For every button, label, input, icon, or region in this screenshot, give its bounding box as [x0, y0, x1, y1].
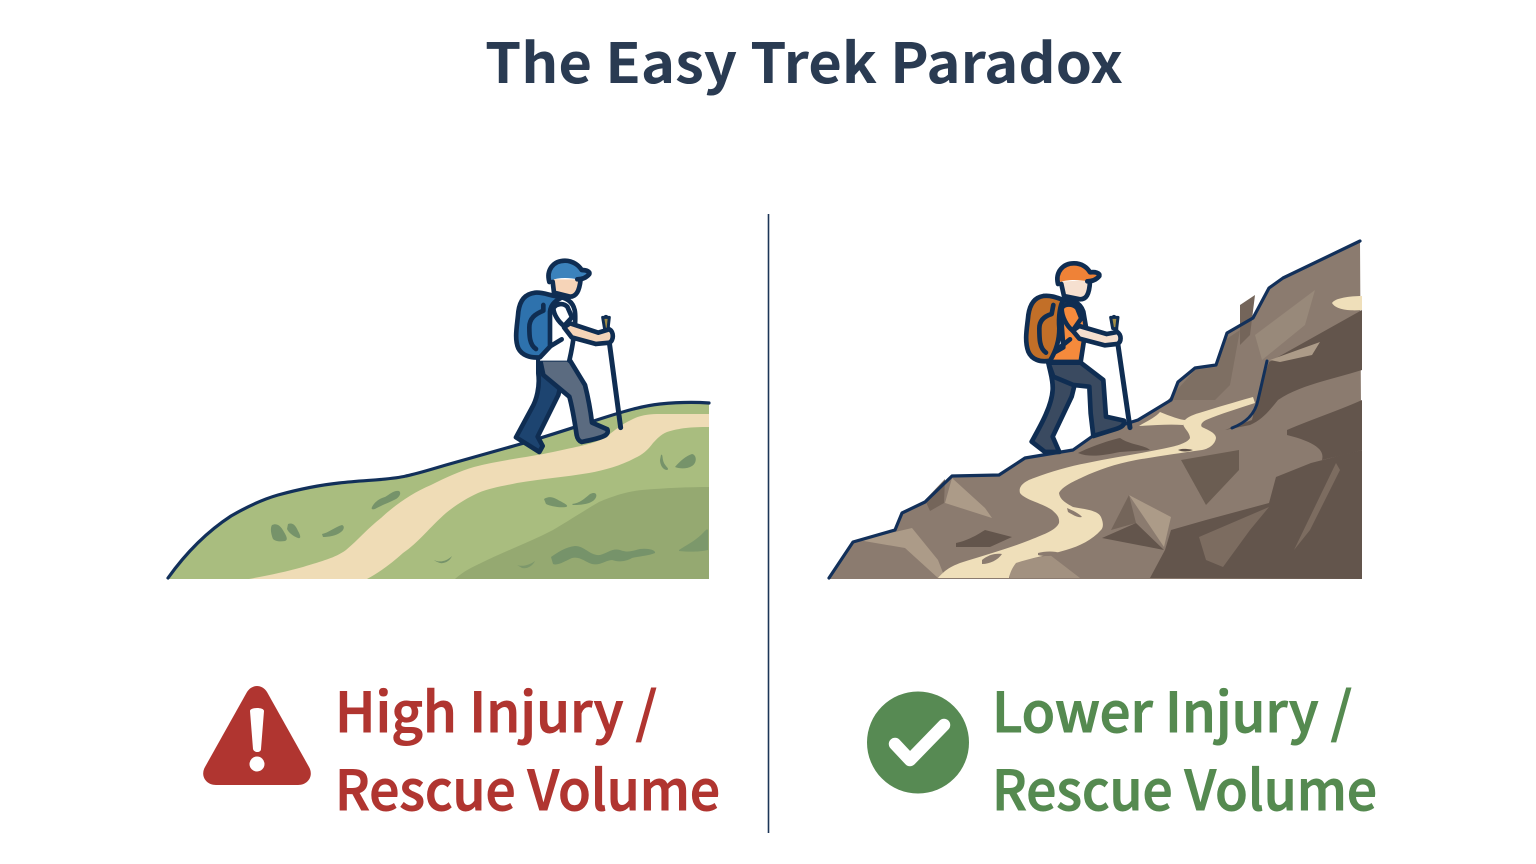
hill outline [168, 402, 709, 578]
panel: hard rocky mountain [829, 241, 1362, 579]
trekking pole [603, 317, 621, 428]
front leg [540, 359, 608, 442]
panel: easy green hill [168, 402, 709, 579]
darker slope shade [455, 487, 709, 579]
icon: warning triangle [203, 686, 311, 785]
winding sandy trail [938, 397, 1255, 578]
dark rock faces [925, 295, 1362, 579]
title: The Easy Trek Paradox [485, 19, 1123, 99]
sleeve [1062, 305, 1081, 331]
arm [564, 323, 613, 344]
head [1061, 280, 1090, 299]
mountain outline [829, 241, 1360, 578]
center divider line [768, 214, 770, 833]
head [553, 279, 581, 297]
icon: green check circle [867, 692, 969, 794]
cliff crack line [1232, 361, 1267, 428]
upper trail branch [1139, 412, 1186, 426]
arm [1073, 326, 1121, 345]
high injury label: Rescue Volume [335, 746, 720, 826]
high injury label: High Injury / [335, 668, 657, 748]
cap [1057, 263, 1099, 284]
trekking pole [1111, 317, 1130, 428]
shirt [540, 298, 576, 361]
backpack [516, 293, 563, 357]
lower injury label: Rescue Volume [992, 746, 1377, 826]
mid-tone rock streaks [1199, 290, 1340, 567]
shirt [1050, 300, 1086, 362]
hill ground [168, 402, 709, 579]
rear leg [516, 358, 562, 452]
icon: hiker in blue [516, 261, 621, 452]
cap [549, 261, 589, 282]
lower injury label: Lower Injury / [992, 668, 1352, 748]
rock base [829, 241, 1362, 579]
backpack [1026, 296, 1063, 361]
distant trail patch [1332, 296, 1362, 310]
icon: hiker in orange [1026, 263, 1130, 452]
rear leg [1032, 363, 1075, 452]
trail pebbles [982, 449, 1193, 564]
light rock faces [858, 342, 1320, 578]
front leg [1048, 363, 1124, 436]
sandy trail [249, 414, 709, 579]
sleeve [553, 304, 572, 326]
grass tufts [271, 454, 708, 568]
